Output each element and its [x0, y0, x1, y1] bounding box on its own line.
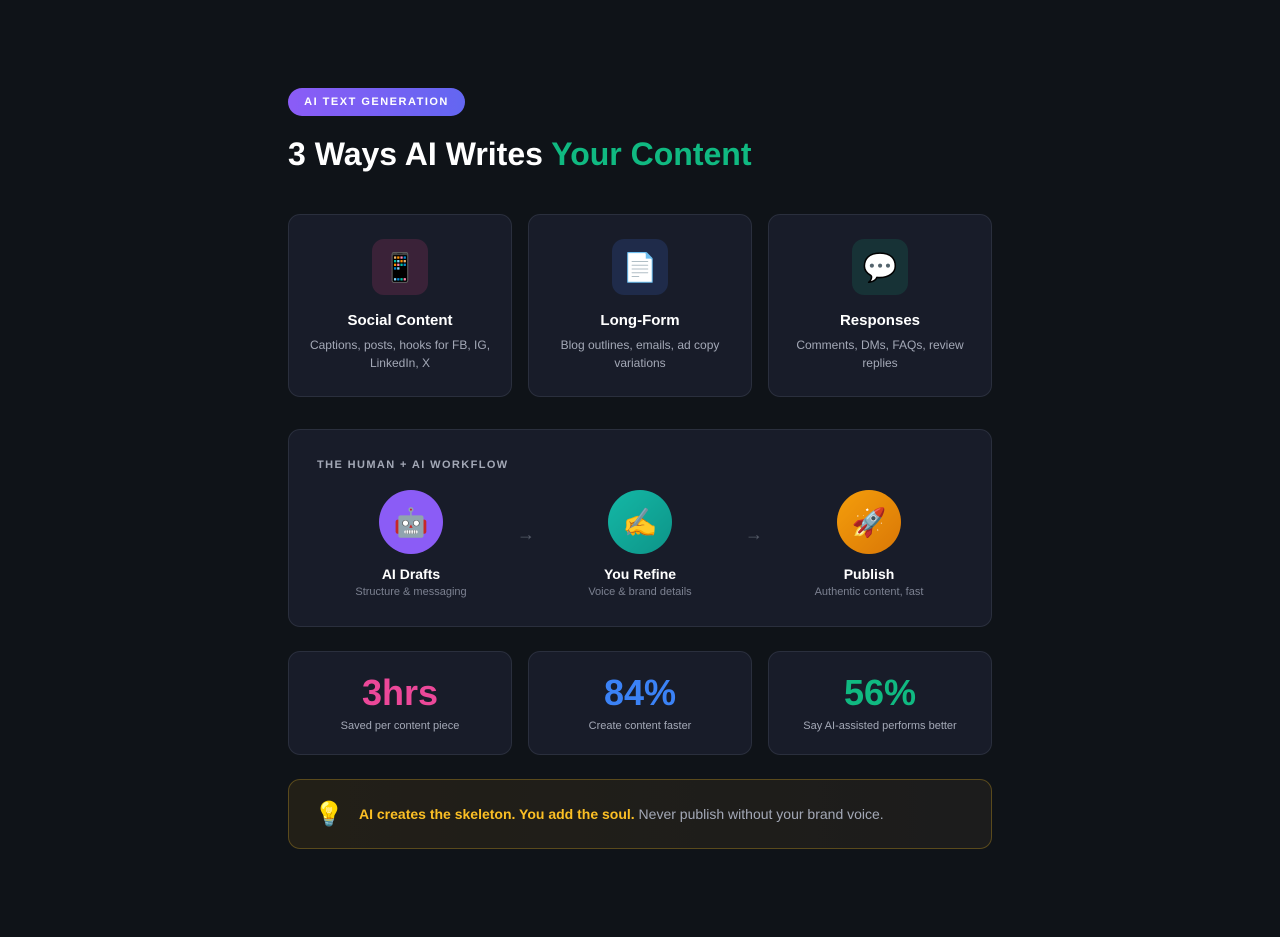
stat: 84%: [528, 651, 752, 755]
heading: Long-Form: [600, 312, 680, 329]
value: 3hrs: [362, 672, 438, 713]
callout: tip: [288, 779, 992, 849]
stat: 3hrs: [288, 651, 512, 755]
step: publish: Authentic content, fast: [815, 586, 923, 598]
panel: workflow: [288, 429, 992, 627]
step: AI drafts: [355, 490, 467, 598]
value: 56%: [844, 672, 916, 713]
card: social content: [288, 214, 512, 397]
label: Saved per content piece: [341, 720, 459, 732]
heading: Responses: [840, 312, 920, 329]
workflow heading: THE HUMAN + AI WORKFLOW: [317, 459, 509, 471]
label: Create content faster: [589, 720, 691, 732]
icon: speech bubble: 💬: [863, 252, 897, 282]
badge: [288, 88, 465, 116]
card: long-form: [528, 214, 752, 397]
arrow: →: [517, 524, 535, 544]
icon: bulb: 💡: [314, 801, 344, 828]
value: 84%: [604, 672, 676, 713]
step: AI drafts: Structure & messaging: [355, 586, 467, 598]
description: Captions, posts, hooks for FB, IG, LinkedIn, X: [310, 338, 490, 370]
step: you refine: [588, 490, 692, 598]
arrow: →: [745, 524, 763, 544]
icon: speech bubble: [852, 239, 908, 295]
step: AI drafts: 🤖: [394, 506, 428, 538]
heading: Social Content: [347, 312, 452, 329]
icon: phone: 📱: [383, 252, 417, 282]
icon: document: [612, 239, 668, 295]
tip text: AI creates the skeleton. You add the soul. Never publish without your brand voice.: [359, 806, 884, 822]
step: publish: Publish: [844, 566, 894, 582]
step: you refine: You Refine: [604, 566, 676, 582]
step: you refine: ✍️: [623, 506, 657, 538]
step: publish: [814, 490, 924, 598]
step: you refine: Voice & brand details: [588, 586, 692, 598]
icon: document: 📄: [623, 252, 657, 282]
description: Blog outlines, emails, ad copy variations: [561, 338, 719, 370]
title: 3 Ways AI Writes Your Content: [288, 136, 751, 172]
step: AI drafts: AI Drafts: [382, 566, 440, 582]
description: Comments, DMs, FAQs, review replies: [796, 338, 964, 370]
step: publish: 🚀: [852, 506, 886, 538]
stat: 56%: [768, 651, 992, 755]
badge: AI TEXT GENERATION: [304, 96, 449, 108]
label: Say AI-assisted performs better: [803, 720, 957, 732]
icon: phone: [372, 239, 428, 295]
card: responses: [768, 214, 992, 397]
